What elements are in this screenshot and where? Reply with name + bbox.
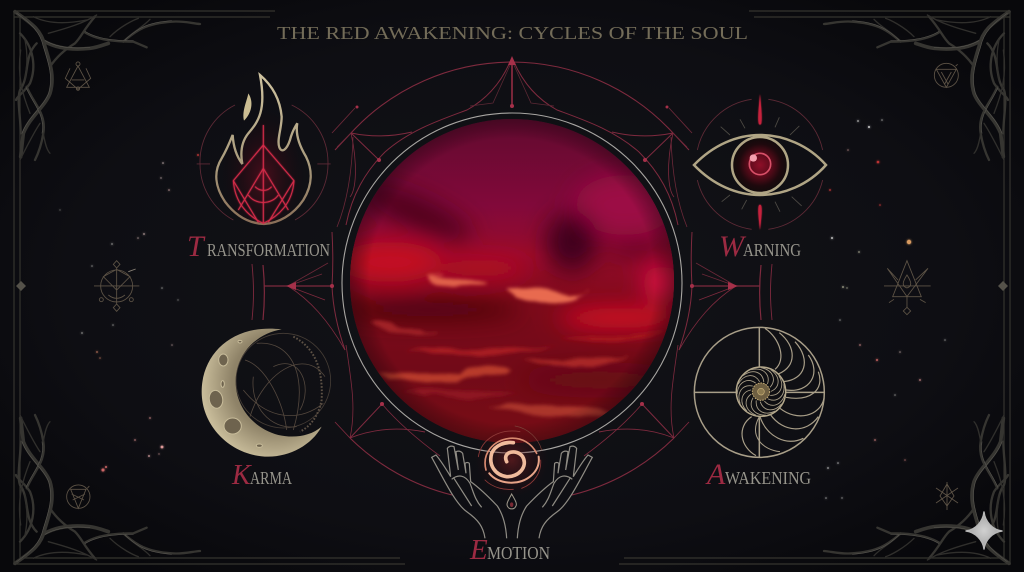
sigil: mid right	[884, 261, 931, 315]
sigil: bottom left	[67, 485, 90, 508]
label: Emotion: E	[469, 534, 488, 566]
sigil: bottom right	[936, 482, 958, 510]
label: Warning: W	[719, 230, 747, 263]
icon: flame (Transformation)	[197, 75, 331, 224]
icon: eye (Warning)	[694, 94, 826, 230]
inner red geometry	[233, 125, 294, 223]
icon: crescent moon (Karma)	[202, 329, 331, 457]
sigil: mid left	[94, 261, 139, 311]
label: Awakening: A	[705, 458, 726, 491]
warning spikes	[758, 94, 762, 125]
crescent	[202, 329, 322, 457]
frame diamond: left	[16, 281, 26, 291]
label: Transformation: RANSFORMATION	[207, 240, 330, 260]
icon: hands and swirl (Emotion)	[432, 423, 592, 538]
left hand	[432, 446, 507, 538]
inner line circle	[236, 333, 331, 432]
disc outer ring	[342, 113, 682, 453]
craters	[208, 340, 262, 447]
outer circle and cross	[694, 327, 824, 457]
label: Karma: ARMA	[250, 468, 292, 488]
filigree: sacred geometry around disc	[252, 56, 772, 495]
flame body	[216, 75, 311, 224]
flame wisp	[243, 93, 251, 121]
shell centre	[752, 383, 770, 400]
scattered star particles	[59, 119, 946, 499]
frame diamond: right	[998, 281, 1008, 291]
sigil: top left	[65, 62, 91, 90]
sigil: top right	[934, 63, 958, 87]
eye halo	[697, 99, 823, 229]
nautilus shell	[736, 367, 786, 416]
teardrop	[507, 494, 516, 509]
corner vine: top left	[15, 12, 200, 160]
label: Warning: ARNING	[743, 240, 801, 260]
iris	[732, 137, 788, 193]
icon: nautilus (Awakening)	[694, 327, 824, 457]
label: Karma: K	[231, 460, 252, 491]
spiral	[478, 426, 542, 489]
sparkle watermark	[966, 512, 1002, 549]
label: Awakening: WAKENING	[725, 468, 811, 488]
title: THE RED AWAKENING: CYCLES OF THE SOUL	[277, 23, 748, 43]
label: Emotion: MOTION	[487, 543, 550, 563]
corner vine: bottom left	[15, 415, 200, 563]
corner vine: top right	[824, 12, 1009, 160]
corner vine: bottom right	[824, 415, 1009, 563]
eye outline	[694, 135, 826, 195]
flame halo circle	[197, 105, 331, 220]
label: Transformation: T	[187, 230, 206, 263]
swirl glow	[475, 423, 548, 497]
central disc: red sky	[350, 119, 674, 443]
spiral chambers	[765, 328, 781, 369]
